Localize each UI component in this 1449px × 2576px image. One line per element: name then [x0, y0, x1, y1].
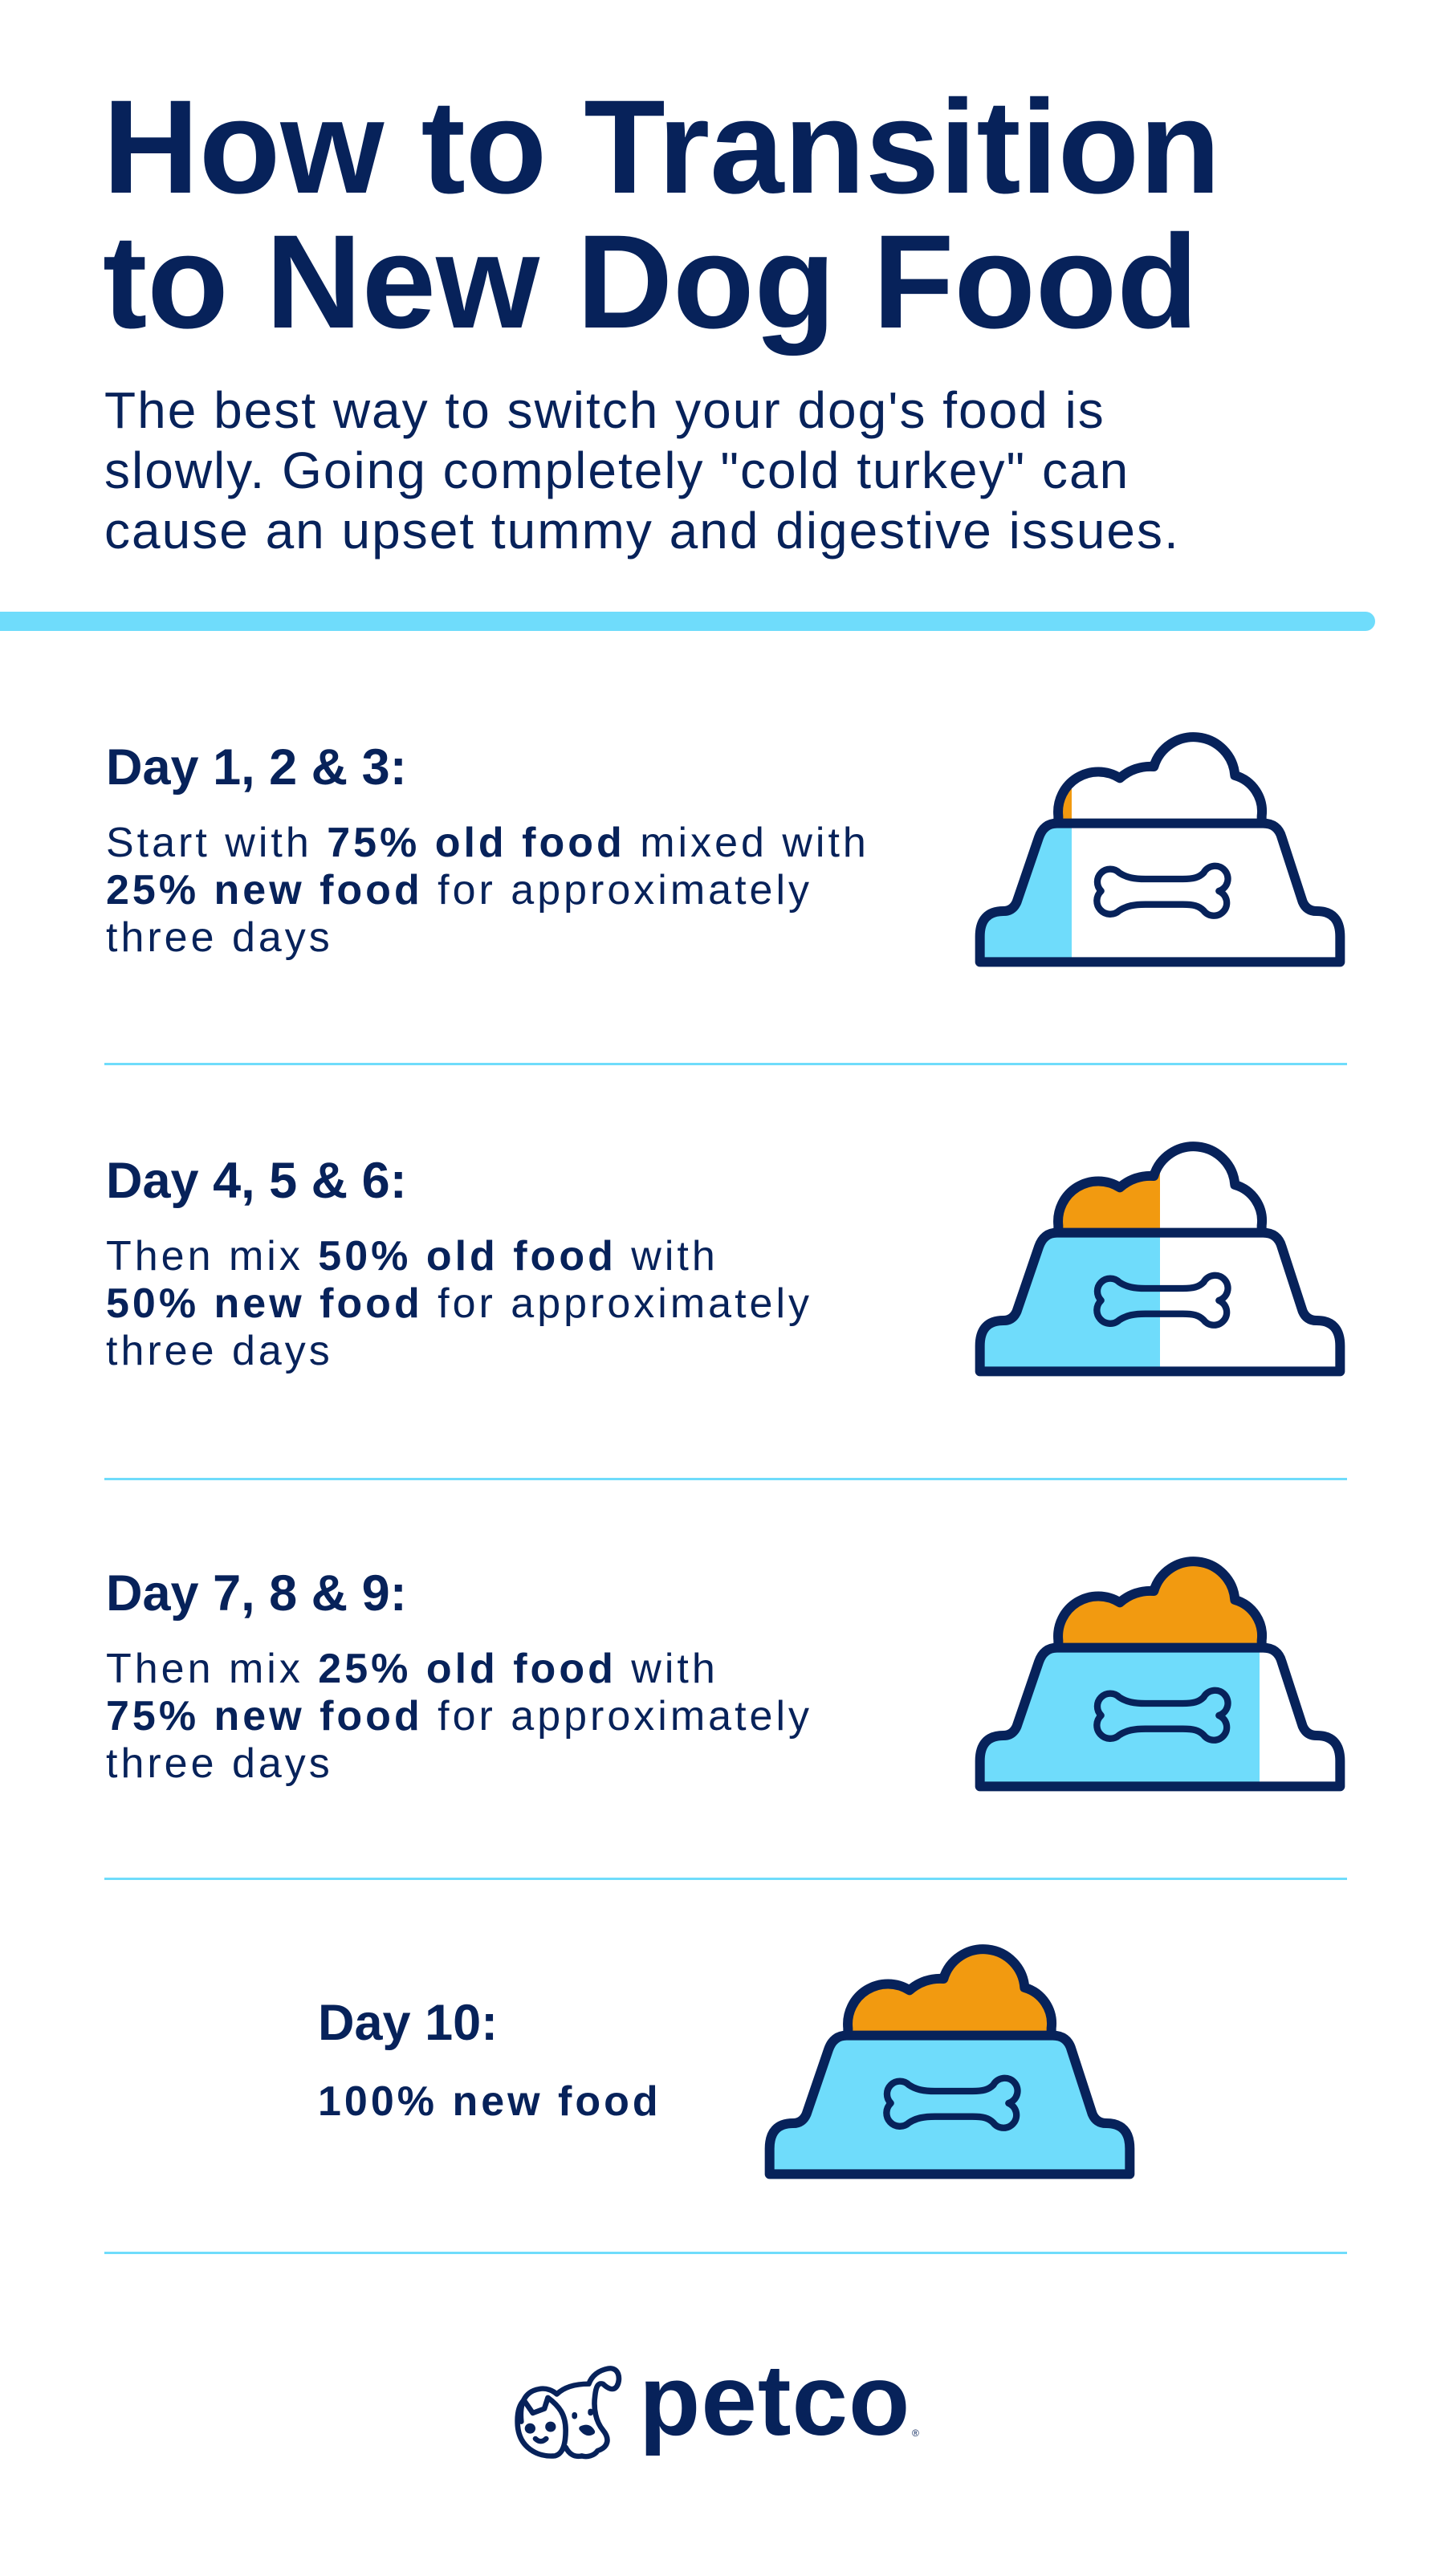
- step 4 text: 100% new food: [318, 2078, 661, 2125]
- icon: bowl 50% new: [975, 1141, 1345, 1376]
- step 2 text: Then mix 50% old food with: [106, 1233, 718, 1280]
- step 3 text: Then mix 25% old food with: [106, 1646, 718, 1692]
- title: [103, 73, 1221, 356]
- icon: bowl 25% new: [975, 732, 1345, 967]
- step 2 text: 50% new food for approximately: [106, 1280, 812, 1327]
- icon: bowl 75% new: [975, 1557, 1345, 1792]
- subtitle: cause an upset tummy and digestive issues.: [104, 502, 1180, 560]
- logo: ®: [912, 2427, 919, 2439]
- icon: cat and dog: [515, 2366, 621, 2460]
- step 2 heading: Day 4, 5 & 6:: [106, 1153, 407, 1209]
- subtitle: slowly. Going completely "cold turkey" can: [104, 442, 1129, 499]
- step 4 heading: Day 10:: [318, 1995, 498, 2051]
- step 2 text: three days: [106, 1328, 333, 1374]
- header bar: [0, 612, 1375, 631]
- logo: [515, 2345, 919, 2460]
- icon: bowl 100% new: [764, 1944, 1135, 2179]
- step 1 text: 25% new food for approximately: [106, 867, 812, 914]
- step 3 text: three days: [106, 1740, 333, 1787]
- step 1 text: Start with 75% old food mixed with: [106, 820, 869, 866]
- subtitle: The best way to switch your dog's food is: [104, 381, 1105, 439]
- step 3 text: [106, 1646, 812, 1787]
- step 3 text: 75% new food for approximately: [106, 1693, 812, 1740]
- step 1 text: [106, 820, 869, 961]
- step 3 heading: Day 7, 8 & 9:: [106, 1565, 407, 1622]
- title: to New Dog Food: [103, 208, 1199, 356]
- title: How to Transition: [103, 73, 1221, 222]
- subtitle: [104, 381, 1180, 560]
- step 2 text: [106, 1233, 812, 1374]
- step 1 text: three days: [106, 914, 333, 961]
- step 1 heading: Day 1, 2 & 3:: [106, 739, 407, 796]
- wordmark: petco: [639, 2345, 910, 2456]
